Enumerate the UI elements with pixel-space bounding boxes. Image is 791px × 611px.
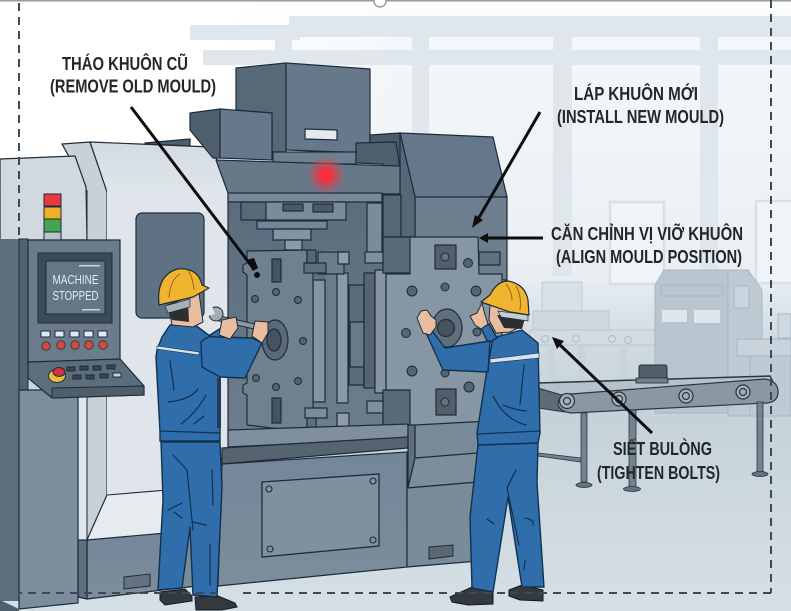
worker left	[156, 269, 268, 610]
mould ring	[432, 309, 462, 347]
label: remove old mould: (REMOVE OLD MOULD)	[50, 76, 216, 96]
background: distant machines	[530, 270, 791, 416]
arrow: remove old mould	[131, 107, 260, 278]
arrow: tighten bolts	[552, 337, 652, 433]
forearm	[481, 324, 497, 343]
worker right	[417, 281, 544, 605]
trousers	[470, 443, 544, 592]
cabinet window	[136, 213, 204, 318]
mould: old mould plate (left)	[243, 250, 327, 433]
shoes	[450, 585, 543, 605]
press: upper boxes	[145, 63, 412, 177]
label: tighten bolts: (TIGHTEN BOLTS)	[597, 463, 720, 483]
press: right housing	[356, 133, 507, 280]
mould ring	[262, 320, 288, 360]
label: install new mould	[557, 83, 724, 127]
head	[168, 293, 203, 327]
label: tighten bolts: SIẾT BULÒNG	[613, 438, 712, 459]
trousers	[158, 442, 222, 597]
hard hat	[159, 269, 209, 305]
label: align mould position: (ALIGN MOULD POSITION)	[556, 247, 742, 267]
screen: machine stopped: STOPPED	[52, 289, 98, 303]
label: align mould position: CĂN CHỈNH VỊ VIỠ KHUÔN	[551, 223, 743, 244]
label: remove old mould	[50, 53, 216, 96]
indicator lamps and red buttons	[41, 331, 107, 350]
arrow: align mould position	[479, 233, 543, 243]
wrench	[206, 306, 255, 329]
stack light	[44, 194, 61, 240]
label: install new mould: (INSTALL NEW MOULD)	[557, 107, 724, 127]
hands	[417, 310, 436, 335]
jacket	[156, 325, 220, 441]
arrow: install new mould	[472, 112, 540, 228]
machine base	[218, 421, 490, 586]
background: roof beams and columns	[190, 16, 791, 284]
press: interior frame	[216, 160, 401, 439]
arm	[427, 332, 490, 372]
machine: left upper side housing	[0, 156, 87, 240]
shoes	[160, 589, 237, 610]
hard hat	[481, 281, 529, 315]
jacket	[477, 330, 540, 445]
head	[489, 305, 522, 333]
mould: new mould plate (right)	[383, 237, 502, 428]
hands	[219, 317, 238, 339]
label: remove old mould: THÁO KHUÔN CŨ	[62, 53, 188, 74]
label: tighten bolts	[597, 438, 720, 483]
conveyor	[538, 365, 778, 492]
mould: guide rails and clamps	[313, 252, 389, 427]
screen: machine stopped: MACHINE	[52, 273, 98, 287]
red warning light	[306, 155, 346, 195]
control console	[0, 239, 144, 611]
keypad ledge with emergency stop	[28, 359, 144, 398]
forearm	[210, 328, 227, 347]
label: install new mould: LÁP KHUÔN MỚI	[574, 83, 698, 104]
screen: machine stopped	[38, 253, 112, 323]
arm	[201, 337, 262, 378]
label: align mould position	[551, 223, 743, 267]
machine: white cabinet	[62, 142, 229, 599]
